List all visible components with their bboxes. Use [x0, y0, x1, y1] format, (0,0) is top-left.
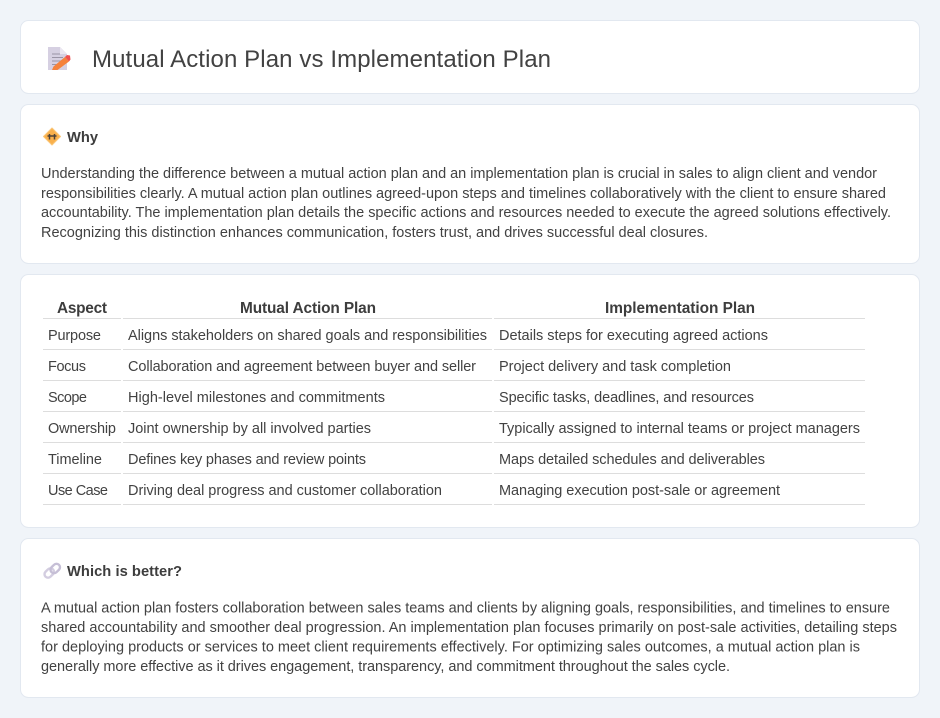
row: timeline: Defines key phases and review points: [128, 452, 366, 468]
heading: why: Why: [67, 130, 99, 146]
row: focus: [43, 359, 865, 381]
panel: comparison table: [20, 274, 920, 528]
row: ownership: Joint ownership by all involved parties: [128, 421, 371, 437]
panel: why: [20, 104, 920, 264]
row: purpose: [43, 328, 865, 350]
text block: which is better: A mutual action plan fosters collaboration between sales teams and clients by aligning goals, responsibilities, and timelines to ensure: [41, 600, 890, 616]
row: focus: Focus: [48, 359, 86, 375]
row: purpose: Details steps for executing agreed actions: [499, 328, 768, 344]
row: timeline: Maps detailed schedules and deliverables: [499, 452, 765, 468]
heading: which is better: Which is better?: [67, 564, 182, 580]
row: use case: Managing execution post-sale or agreement: [499, 483, 780, 499]
text block: why: Understanding the difference between a mutual action plan and an implementation plan is crucial in sales to align client and vendor: [41, 166, 877, 182]
text block: which is better: for deploying products or services to meet client requirements effectively. For optimizing sales outcomes, a mutual action plan is: [41, 640, 860, 656]
row: scope: [43, 390, 865, 412]
row: scope: Specific tasks, deadlines, and resources: [499, 390, 754, 406]
text block: which is better: generally more effective as it drives engagement, transparency, and commitment throughout the sales cycle.: [41, 659, 730, 675]
table header: Mutual Action Plan: [240, 300, 376, 317]
icon: document with pencil: [48, 47, 70, 70]
row: scope: High-level milestones and commitments: [128, 390, 385, 406]
panel: which is better: [20, 538, 920, 698]
row: focus: Project delivery and task completion: [499, 359, 731, 375]
title: Mutual Action Plan vs Implementation Plan: [92, 46, 551, 73]
row: timeline: Timeline: [48, 452, 102, 468]
icon: warning diamond: [44, 128, 60, 145]
table header: Aspect: [57, 300, 107, 317]
table header: [43, 300, 865, 319]
row: purpose: Purpose: [48, 328, 101, 344]
table header: Implementation Plan: [605, 300, 755, 317]
panel: header: [20, 20, 920, 94]
text block: which is better: shared accountability and smoother deal progression. An implementation plan focuses primarily on post-sale activities, detailing steps: [41, 620, 897, 636]
text block: which is better: [41, 600, 897, 675]
row: use case: Driving deal progress and customer collaboration: [128, 483, 442, 499]
icon: link: [43, 562, 61, 579]
row: purpose: Aligns stakeholders on shared goals and responsibilities: [128, 328, 487, 344]
row: ownership: [43, 421, 865, 443]
row: focus: Collaboration and agreement between buyer and seller: [128, 359, 476, 375]
text block: why: Recognizing this distinction enhances communication, fosters trust, and drives successful deal closures.: [41, 225, 708, 241]
row: ownership: Ownership: [48, 421, 116, 437]
text block: why: responsibilities clearly. A mutual action plan outlines agreed-upon steps and timelines collaboratively with the client to ensure shared: [41, 186, 886, 202]
row: scope: Scope: [48, 390, 87, 406]
row: use case: [43, 483, 865, 505]
row: ownership: Typically assigned to internal teams or project managers: [499, 421, 860, 437]
text block: why: [41, 166, 891, 241]
row: use case: Use Case: [48, 483, 108, 499]
text block: why: accountability. The implementation plan details the specific actions and resources needed to execute the agreed solutions effectively.: [41, 205, 891, 221]
row: timeline: [43, 452, 865, 474]
